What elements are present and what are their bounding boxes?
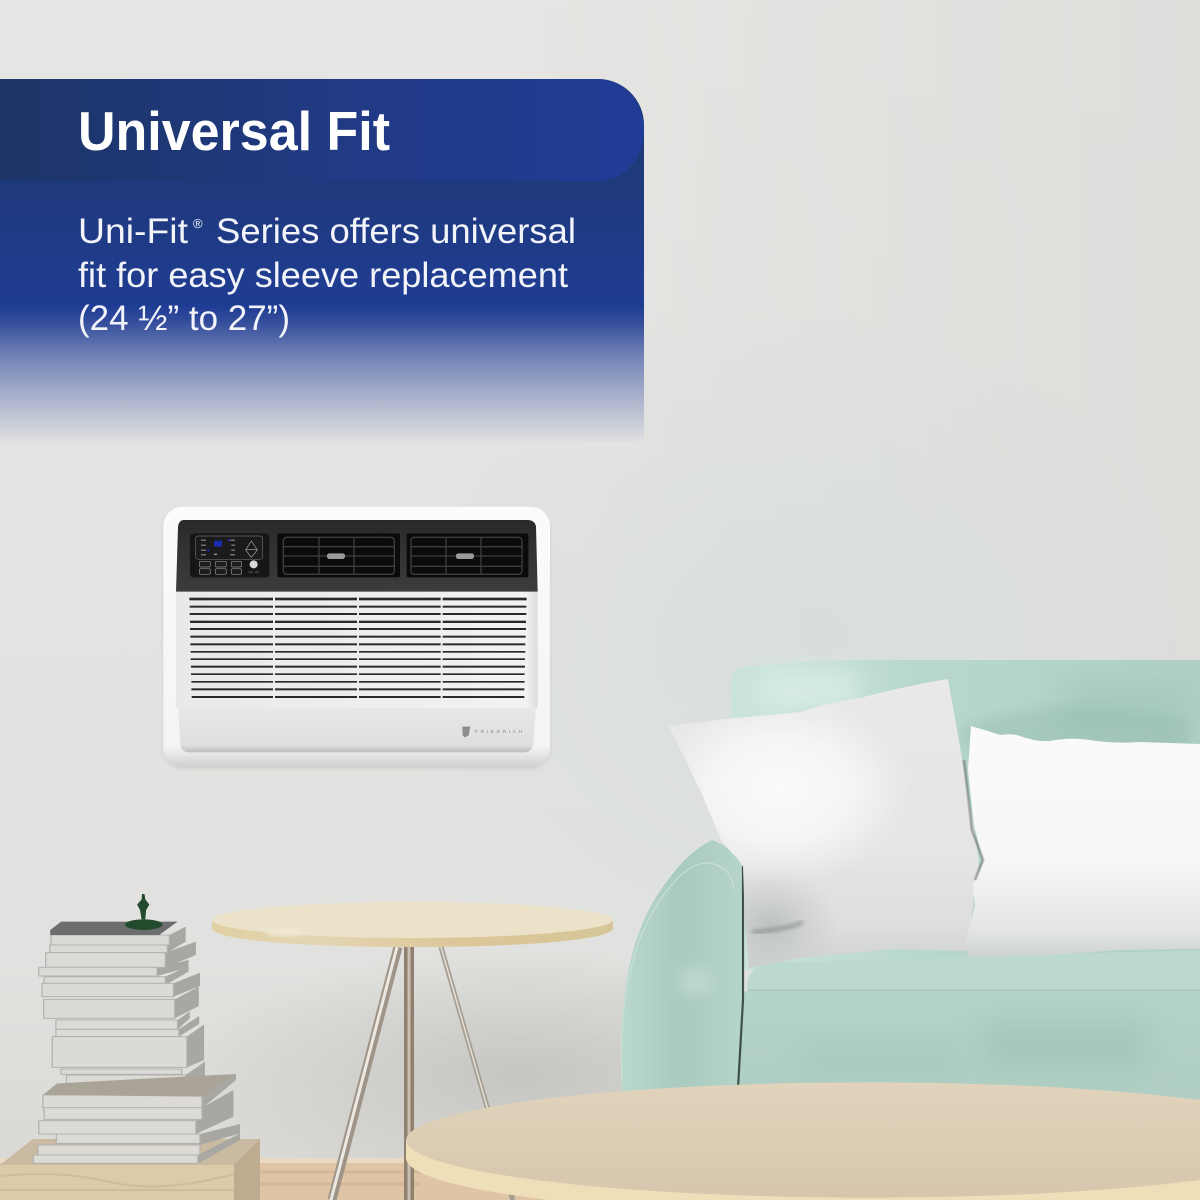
wall sleeve frame bbox=[163, 507, 550, 769]
pillow highlight bbox=[690, 713, 876, 872]
title band bbox=[0, 79, 644, 181]
left pillow bbox=[669, 679, 979, 968]
header panel bbox=[0, 79, 644, 445]
coffee table bbox=[406, 1082, 1200, 1200]
description bbox=[78, 212, 576, 338]
description: Uni-Fit bbox=[78, 212, 188, 251]
lower front panel bbox=[178, 707, 536, 752]
wooden box bbox=[0, 1139, 260, 1200]
left air vent bbox=[277, 533, 400, 577]
description: ® bbox=[193, 216, 203, 231]
air conditioner bbox=[163, 507, 550, 769]
buttons bbox=[199, 561, 242, 574]
title: Universal Fit bbox=[78, 100, 390, 162]
table top bbox=[212, 902, 613, 947]
description: fit for easy sleeve replacement bbox=[78, 256, 568, 295]
up and down keys bbox=[246, 541, 257, 557]
side table bbox=[212, 902, 613, 1200]
pillow shadow on back bbox=[964, 710, 1188, 752]
power button bbox=[250, 560, 258, 568]
stack of books bbox=[33, 894, 240, 1163]
table legs bbox=[331, 947, 513, 1200]
right air vent bbox=[407, 533, 528, 577]
coffee table top bbox=[406, 1082, 1200, 1198]
top dark book bbox=[50, 922, 178, 935]
seat cushion bbox=[739, 950, 1200, 1100]
control panel bbox=[190, 533, 269, 577]
pillow fold bbox=[752, 922, 803, 932]
gap shadow between pillows bbox=[964, 760, 983, 880]
control panel: Uni - Fit bbox=[248, 570, 259, 574]
temperature display bbox=[214, 541, 222, 547]
green ornament bbox=[125, 894, 162, 930]
top magazine cover bbox=[43, 1074, 236, 1097]
louvre grill bbox=[176, 591, 538, 708]
sofa back bbox=[731, 660, 1200, 970]
panel body gradient bbox=[0, 79, 644, 445]
sofa bbox=[621, 660, 1200, 1120]
right pillow bbox=[965, 726, 1200, 957]
sofa arm bbox=[621, 840, 743, 1095]
brand logo bbox=[462, 727, 470, 737]
pillow lower shade bbox=[744, 882, 816, 956]
coffee table edge bbox=[406, 1140, 1200, 1200]
description: Series offers universal bbox=[216, 212, 576, 251]
description: (24 ½” to 27”) bbox=[78, 299, 290, 338]
brand name: FRIEDRICH bbox=[475, 729, 525, 735]
dark top housing bbox=[176, 520, 538, 592]
wooden floor bbox=[0, 1158, 1200, 1200]
